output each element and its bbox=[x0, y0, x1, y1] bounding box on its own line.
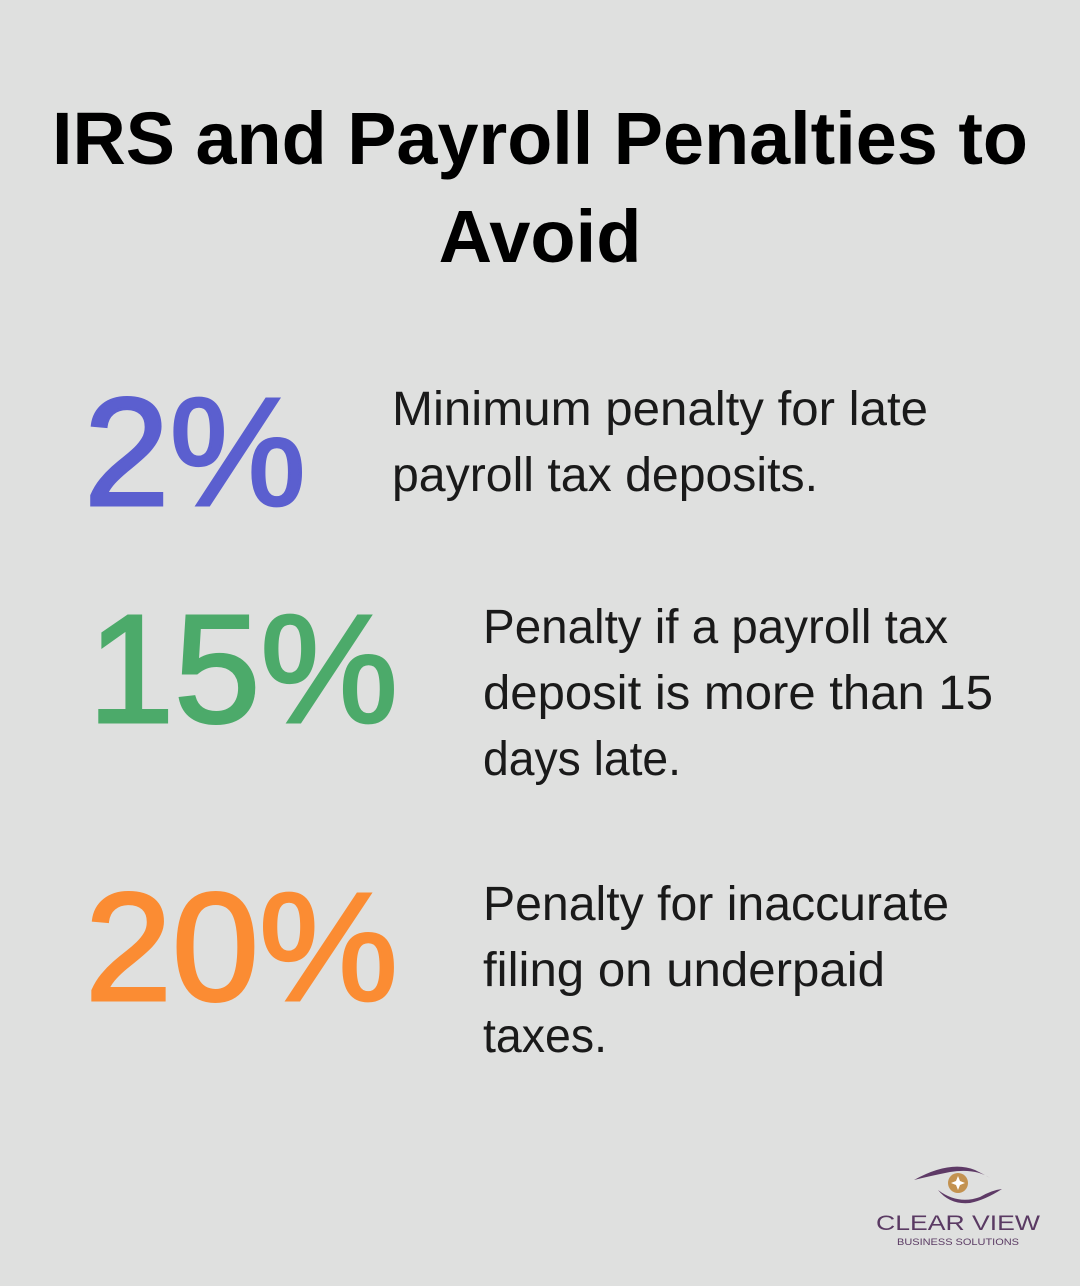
description 20%: Penalty for inaccurate bbox=[483, 878, 949, 931]
stat: 15% bbox=[88, 583, 993, 786]
stat: 20% bbox=[85, 861, 949, 1063]
description 2%: Minimum penalty for late bbox=[392, 383, 928, 436]
icon: eye bbox=[914, 1167, 1002, 1203]
description 15%: deposit is more than 15 bbox=[483, 667, 993, 720]
title bbox=[52, 97, 1028, 278]
description 20%: filing on underpaid bbox=[483, 944, 885, 997]
description 20% bbox=[483, 878, 949, 1063]
number 2%: 2% bbox=[84, 366, 306, 538]
number 15%: 15% bbox=[88, 583, 398, 755]
logo: Clear View bbox=[876, 1167, 1040, 1247]
description 2% bbox=[392, 383, 928, 502]
description 15%: Penalty if a payroll tax bbox=[483, 601, 948, 654]
logo: Clear View: BUSINESS SOLUTIONS bbox=[897, 1237, 1019, 1247]
logo text: CLEAR VIEW bbox=[876, 1212, 1040, 1235]
title: Avoid bbox=[439, 195, 641, 278]
description 15%: days late. bbox=[483, 733, 681, 786]
description 20%: taxes. bbox=[483, 1010, 607, 1063]
description 15% bbox=[483, 601, 993, 786]
stat: 2% bbox=[84, 366, 928, 538]
number 20%: 20% bbox=[85, 861, 398, 1033]
description 2%: payroll tax deposits. bbox=[392, 449, 818, 502]
title: IRS and Payroll Penalties to bbox=[52, 97, 1028, 180]
